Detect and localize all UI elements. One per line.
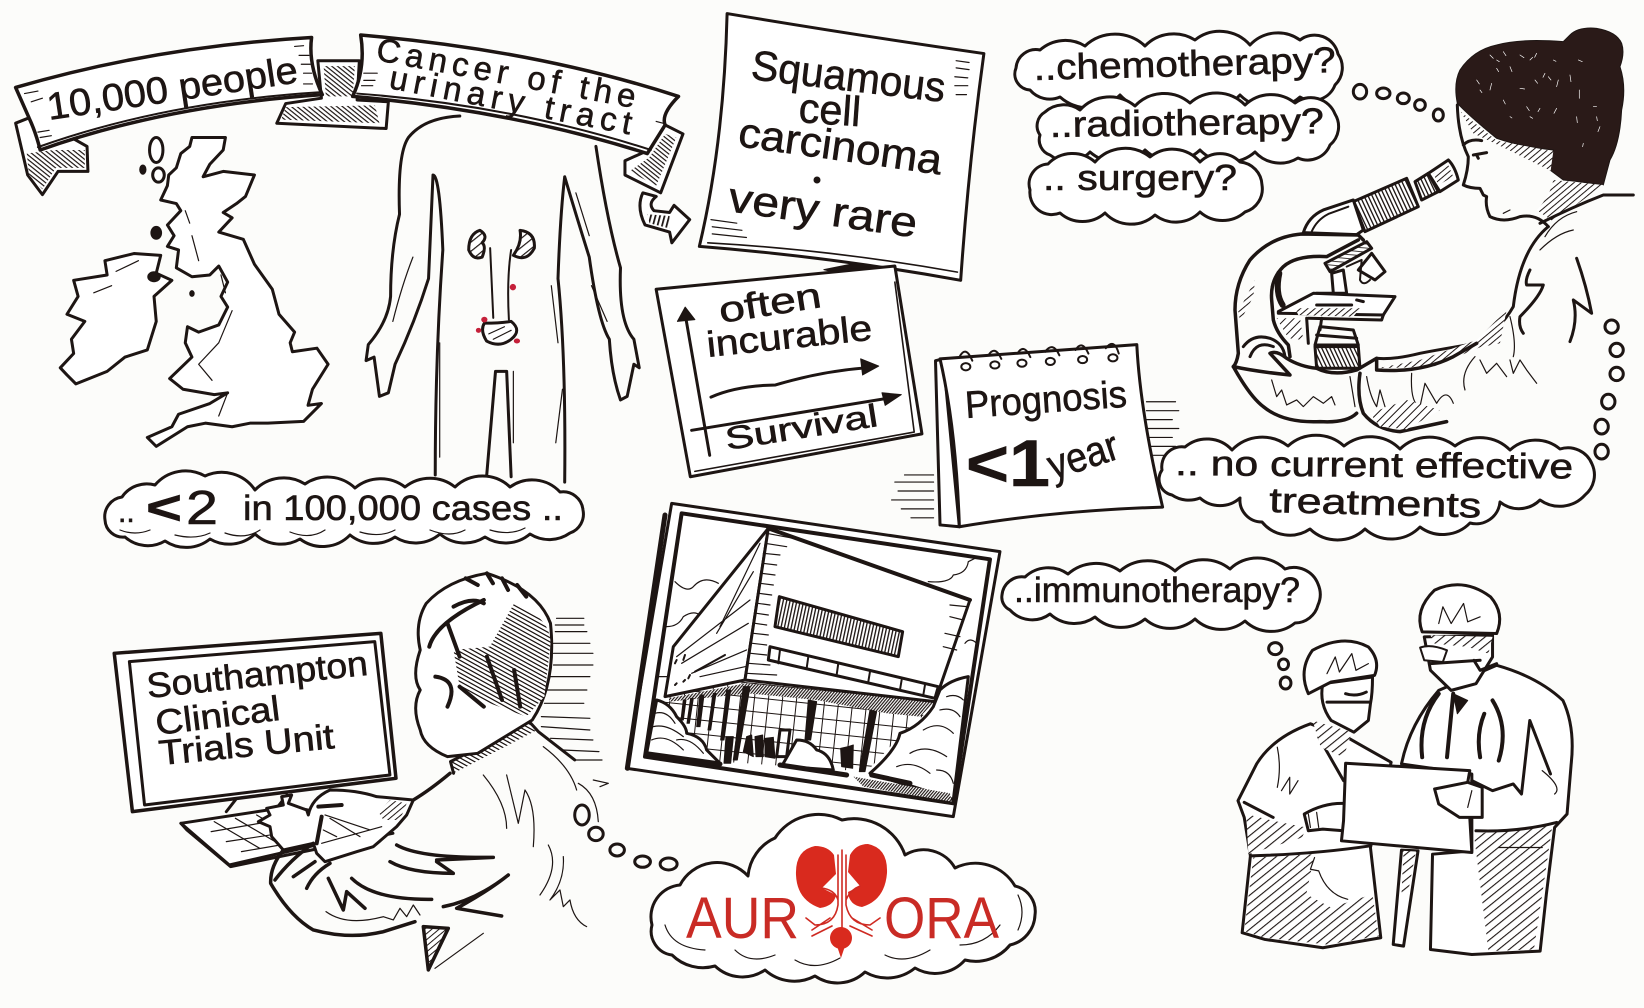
UK and Ireland map — [60, 137, 328, 446]
doctor leg — [1393, 850, 1418, 946]
monitor text: Trials Unit: Trials Unit — [157, 717, 336, 773]
cloud text markers: .. — [118, 496, 135, 529]
chemotherapy text: ..chemotherapy? — [1033, 39, 1336, 88]
figure two: 2 — [186, 482, 218, 535]
scientist at microscope — [1233, 28, 1633, 459]
microscope arm — [1233, 234, 1363, 367]
hands on keyboard — [258, 790, 413, 862]
calendar text: prognosis: Prognosis — [964, 374, 1128, 427]
collar — [451, 722, 537, 773]
thought bubbles — [1353, 84, 1443, 121]
computer monitor — [114, 633, 396, 812]
calendar page — [940, 345, 1163, 527]
doctor coat hatching — [1474, 824, 1553, 951]
calendar text: year: year — [1041, 422, 1124, 489]
microscope stage — [1278, 293, 1395, 315]
hair hatching — [454, 603, 550, 717]
thought bubbles — [1269, 643, 1291, 689]
nurse sleeve hatching — [1246, 814, 1306, 854]
nurse face and mask — [1322, 677, 1373, 732]
coat hem triangle — [423, 927, 448, 970]
logo urinary tract — [796, 844, 887, 958]
hair highlights — [1477, 52, 1600, 147]
note text: carcinoma: carcinoma — [736, 108, 946, 184]
cloud: no current effective treatments — [1159, 435, 1594, 540]
body silhouette — [366, 116, 639, 482]
graph label: often: often — [716, 274, 824, 331]
question cloud: chemotherapy — [1015, 31, 1342, 109]
nurse gown hatching — [1244, 854, 1379, 944]
banner right tail — [625, 125, 683, 193]
building upper window — [775, 597, 903, 657]
cloud text line one: .. no current effective — [1175, 444, 1573, 486]
ground shading — [648, 754, 952, 800]
hatching beside head — [541, 618, 602, 760]
surgery text: .. surgery? — [1043, 157, 1237, 198]
graph label: survival: Survival — [722, 397, 880, 457]
lab coat — [1377, 227, 1592, 359]
entrance door — [777, 730, 790, 757]
calendar spiral rings — [959, 344, 1119, 370]
outer frame — [627, 503, 1000, 817]
banner: 10,000 people — [16, 37, 388, 195]
microscope eyepiece — [1428, 160, 1458, 192]
nurse cap — [1304, 641, 1377, 694]
scientist neck shading — [1537, 180, 1603, 222]
framed building photograph — [627, 503, 1000, 817]
banner ribbon — [16, 37, 322, 150]
trend arrow — [711, 368, 866, 397]
AURORA logo cloud — [651, 814, 1035, 983]
banner left tail — [16, 116, 88, 195]
microscope head — [1303, 200, 1363, 235]
scientist hair — [1456, 28, 1624, 185]
banner text line one: Cancer of the — [374, 31, 639, 115]
coat folds — [328, 845, 508, 916]
note card — [699, 14, 984, 280]
ureters and bladder — [490, 248, 511, 320]
human body outline with urinary tract — [366, 116, 639, 482]
scientist sleeves — [1233, 343, 1477, 432]
question cloud: surgery — [1029, 148, 1262, 224]
building right face — [745, 528, 970, 702]
banner connector — [277, 61, 388, 129]
thought bubbles down the side — [1595, 320, 1623, 459]
note: squamous cell carcinoma — [699, 14, 984, 287]
scientist face — [1457, 105, 1633, 227]
question cloud: radiotherapy — [1037, 93, 1339, 163]
head — [416, 573, 552, 757]
calendar: prognosis under 1 year — [892, 344, 1179, 527]
background clouds — [657, 558, 977, 677]
microscope tube — [1353, 178, 1418, 232]
connecting shadow — [824, 262, 895, 287]
keyboard — [181, 807, 396, 865]
doctor cap — [1420, 585, 1500, 634]
microscope objectives — [1325, 242, 1372, 272]
note text: cell: cell — [797, 84, 862, 135]
lab coat sleeve shading — [1377, 310, 1507, 368]
logo text AUR: AUR — [686, 886, 799, 951]
doctor face and mask — [1424, 635, 1493, 690]
banner: cancer of the urinary tract — [353, 31, 690, 243]
cloud text line two: treatments — [1269, 481, 1482, 526]
banner text: 10,000 people — [44, 50, 301, 129]
monitor text: Southampton: Southampton — [145, 644, 370, 706]
stethoscope and tie — [1421, 694, 1503, 761]
note text: Squamous: Squamous — [749, 41, 948, 111]
map: Ireland — [60, 254, 172, 384]
people silhouettes — [724, 735, 853, 768]
calendar back pages — [936, 359, 959, 527]
logo text ORA: ORA — [884, 886, 999, 951]
inner frame — [645, 513, 990, 803]
graph label: incurable: incurable — [705, 307, 874, 365]
nurse body — [1238, 724, 1391, 948]
thought bubbles — [575, 805, 677, 870]
calendar text: less than one: <1 — [966, 426, 1050, 500]
nurse hand — [1304, 803, 1356, 831]
nurse neck — [1312, 720, 1352, 757]
cloud: less than 2 in 100,000 cases — [105, 471, 583, 547]
axes — [685, 314, 895, 455]
building left face — [665, 528, 768, 697]
monitor screen — [129, 642, 390, 805]
tumour spots — [476, 284, 520, 344]
building lower window — [768, 647, 938, 698]
banner ribbon — [353, 35, 679, 154]
note bullet — [814, 176, 820, 184]
doctor coat — [1401, 665, 1572, 954]
less than two: < — [146, 482, 182, 535]
monitor casing — [114, 633, 396, 812]
doctor hand — [1435, 782, 1482, 817]
monitor text: Clinical: Clinical — [153, 689, 282, 743]
monitor stand — [226, 795, 287, 812]
banner text line two: urinary tract — [387, 59, 635, 141]
map: Great Britain — [147, 137, 328, 446]
trees — [647, 700, 720, 763]
building corner shading — [747, 533, 967, 675]
cloud: immunotherapy — [1002, 558, 1320, 631]
scientist hair shading — [1461, 112, 1553, 171]
clipboard paper — [1341, 763, 1472, 853]
note text: very rare: very rare — [726, 173, 920, 246]
kidneys — [469, 230, 534, 258]
clinicians with clipboard — [1238, 585, 1572, 954]
calendar hatching — [892, 402, 1179, 518]
microscope base — [1307, 318, 1358, 345]
axis arrowheads — [677, 307, 901, 405]
immunotherapy text: ..immunotherapy? — [1014, 571, 1300, 610]
researcher arm — [271, 843, 415, 935]
radiotherapy text: ..radiotherapy? — [1050, 100, 1324, 145]
graph card outline — [656, 266, 922, 477]
arrow below banner — [640, 193, 690, 243]
graph card: often incurable survival — [656, 266, 922, 477]
building columns — [681, 687, 877, 772]
microscope coupling — [1415, 173, 1438, 200]
case count: in 100,000 cases .. — [243, 489, 563, 528]
researcher at keyboard — [181, 573, 677, 970]
map: islands — [94, 137, 232, 416]
building ground floor glazing — [657, 682, 937, 772]
